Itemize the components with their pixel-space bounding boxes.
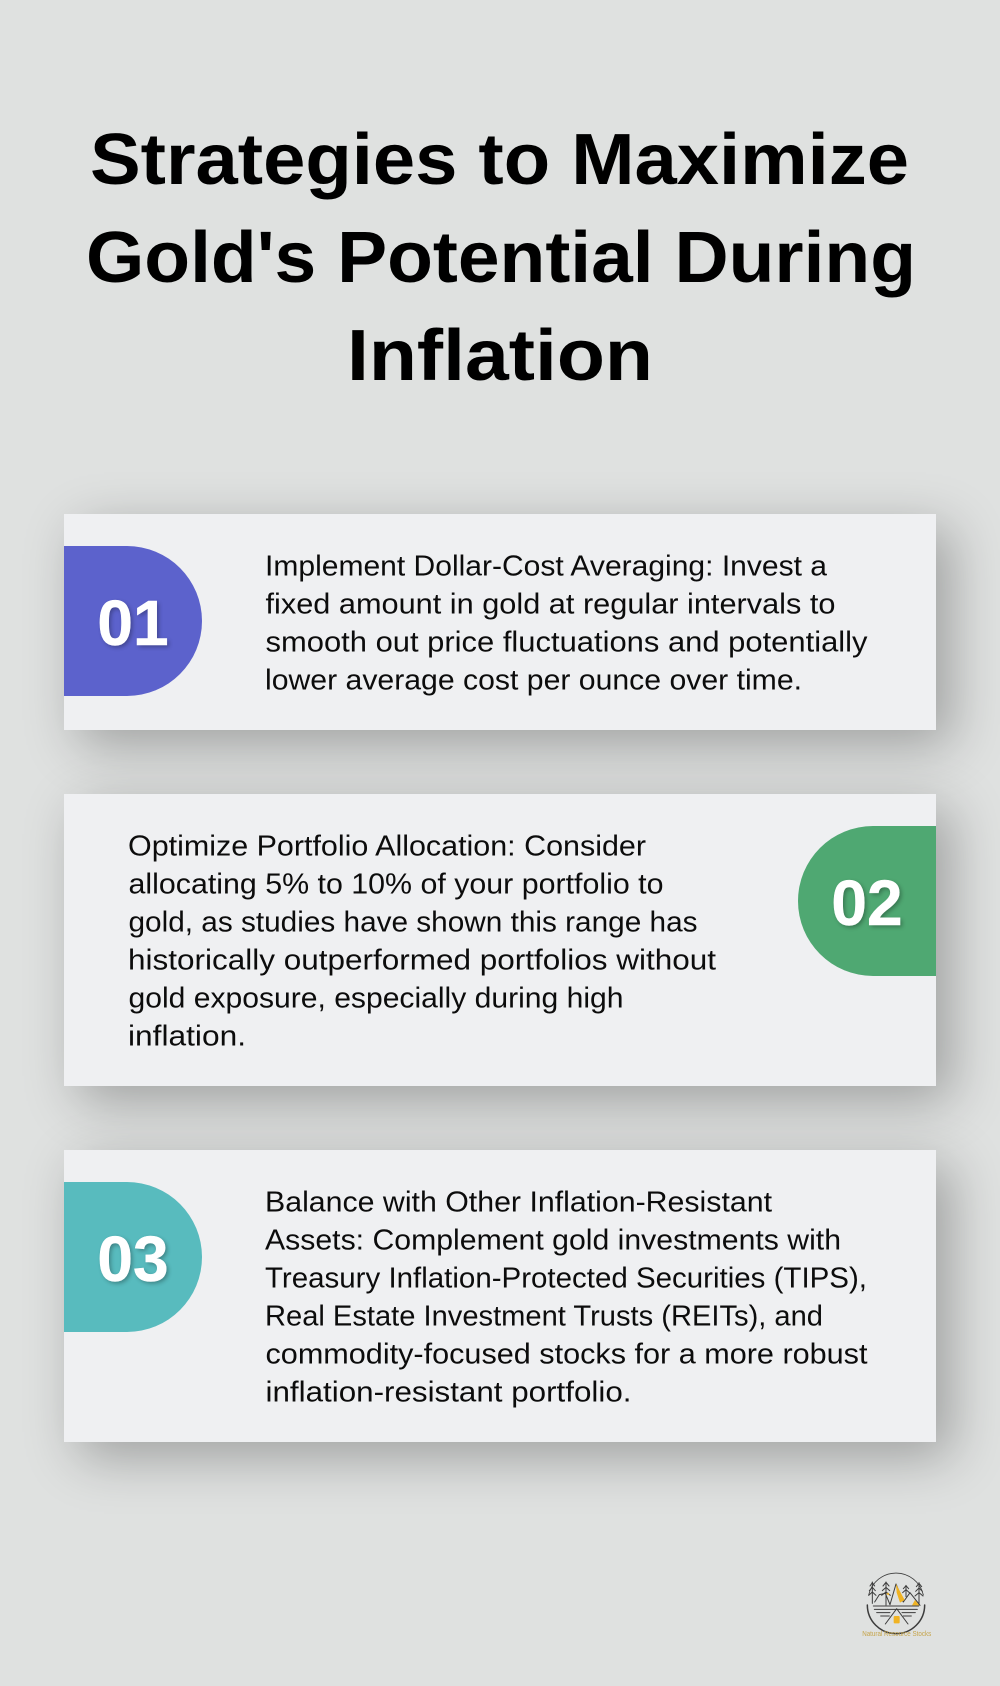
badge: 03	[64, 1182, 202, 1332]
title	[86, 120, 916, 396]
text block: step 01: Implement Dollar-Cost Averaging: Invest a	[265, 551, 827, 583]
text block: step 02: Optimize Portfolio Allocation: Consider	[128, 831, 647, 863]
badge: 01	[64, 546, 202, 696]
title: Gold's Potential During	[86, 218, 916, 298]
text block: step 02: historically outperformed portfolios without	[128, 945, 716, 977]
text block: step 01: smooth out price fluctuations and potentially	[266, 627, 868, 659]
text block: step 02: inflation.	[128, 1021, 246, 1053]
text block: step 03: Treasury Inflation-Protected Securities (TIPS),	[265, 1263, 867, 1295]
badge: 02	[798, 826, 936, 976]
text block: step 03: Balance with Other Inflation-Resistant	[265, 1187, 772, 1219]
text block: step 03: inflation-resistant portfolio.	[266, 1377, 632, 1409]
panel: step 02 portfolio allocation	[64, 794, 936, 1086]
panel: step 01 dollar-cost averaging	[64, 514, 936, 730]
icon: Natural Resource Stocks logo	[862, 1572, 931, 1638]
text block: step 02: gold exposure, especially during high	[128, 983, 624, 1015]
title: Strategies to Maximize	[90, 120, 909, 200]
text block: step 01	[265, 551, 868, 697]
text block: step 02: allocating 5% to 10% of your portfolio to	[128, 869, 664, 901]
title: Inflation	[347, 316, 653, 396]
text block: step 03: Assets: Complement gold investments with	[265, 1225, 841, 1257]
text block: step 02	[128, 831, 716, 1053]
icon: Natural Resource Stocks logo: Natural Resource Stocks	[862, 1629, 931, 1638]
text block: step 03	[265, 1187, 868, 1409]
text block: step 01: fixed amount in gold at regular intervals to	[266, 589, 836, 621]
panel: step 03 inflation-resistant assets	[64, 1150, 936, 1442]
number 03: 03	[97, 1223, 169, 1295]
number 02: 02	[831, 867, 903, 939]
text block: step 01: lower average cost per ounce over time.	[265, 665, 802, 697]
text block: step 03: commodity-focused stocks for a more robust	[266, 1339, 868, 1371]
text block: step 02: gold, as studies have shown this range has	[128, 907, 698, 939]
number 01: 01	[97, 587, 169, 659]
text block: step 03: Real Estate Investment Trusts (REITs), and	[265, 1301, 823, 1333]
